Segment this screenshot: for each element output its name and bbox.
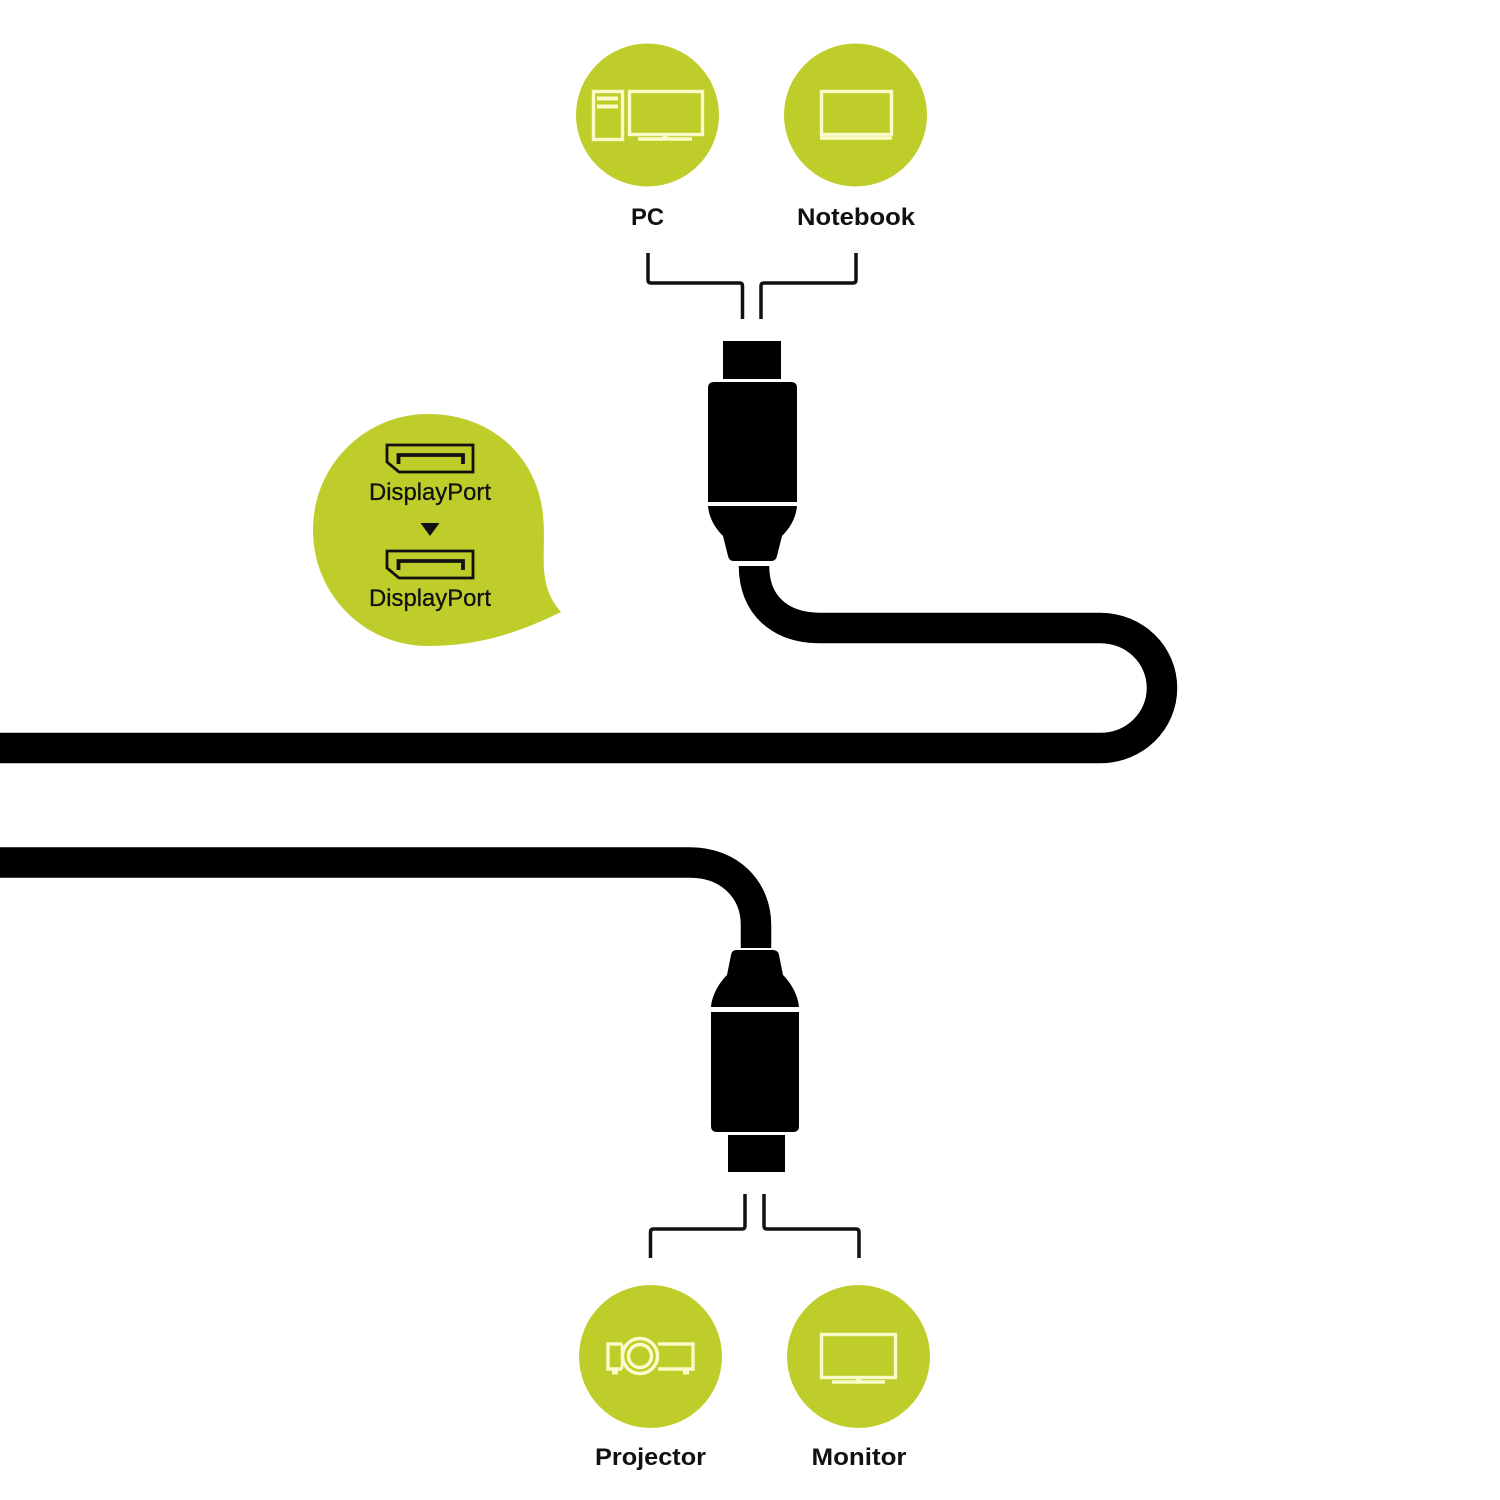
PC circle — [576, 44, 719, 186]
Notebook circle — [784, 44, 927, 186]
Monitor label: Monitor — [812, 1444, 906, 1471]
arrow: down — [420, 523, 440, 536]
icon: monitor — [822, 1334, 896, 1382]
device: PC — [576, 44, 719, 231]
Projector label: Projector — [595, 1444, 706, 1471]
bracket: bottom output devices — [650, 1194, 859, 1258]
icon: DisplayPort connector top — [387, 445, 473, 472]
Projector circle — [579, 1285, 722, 1428]
callout: DisplayPort to DisplayPort — [313, 414, 561, 646]
device: Notebook — [784, 44, 927, 231]
bracket: top source devices — [648, 253, 856, 319]
speech bubble — [313, 414, 561, 646]
Notebook label: Notebook — [797, 204, 916, 231]
icon: projector — [608, 1338, 693, 1374]
cable: lower run — [0, 862, 756, 948]
icon: desktop computer — [594, 92, 702, 140]
icon: laptop — [820, 92, 892, 138]
device: Monitor — [787, 1285, 930, 1471]
connector: top plug — [708, 341, 797, 561]
DisplayPort label top: DisplayPort — [369, 479, 491, 506]
PC label: PC — [631, 204, 664, 231]
DisplayPort label bottom: DisplayPort — [369, 585, 491, 612]
cable: upper loop — [0, 566, 1162, 748]
icon: DisplayPort connector bottom — [387, 551, 473, 578]
Monitor circle — [787, 1285, 930, 1428]
device: Projector — [579, 1285, 722, 1471]
connector: bottom plug — [711, 950, 799, 1172]
